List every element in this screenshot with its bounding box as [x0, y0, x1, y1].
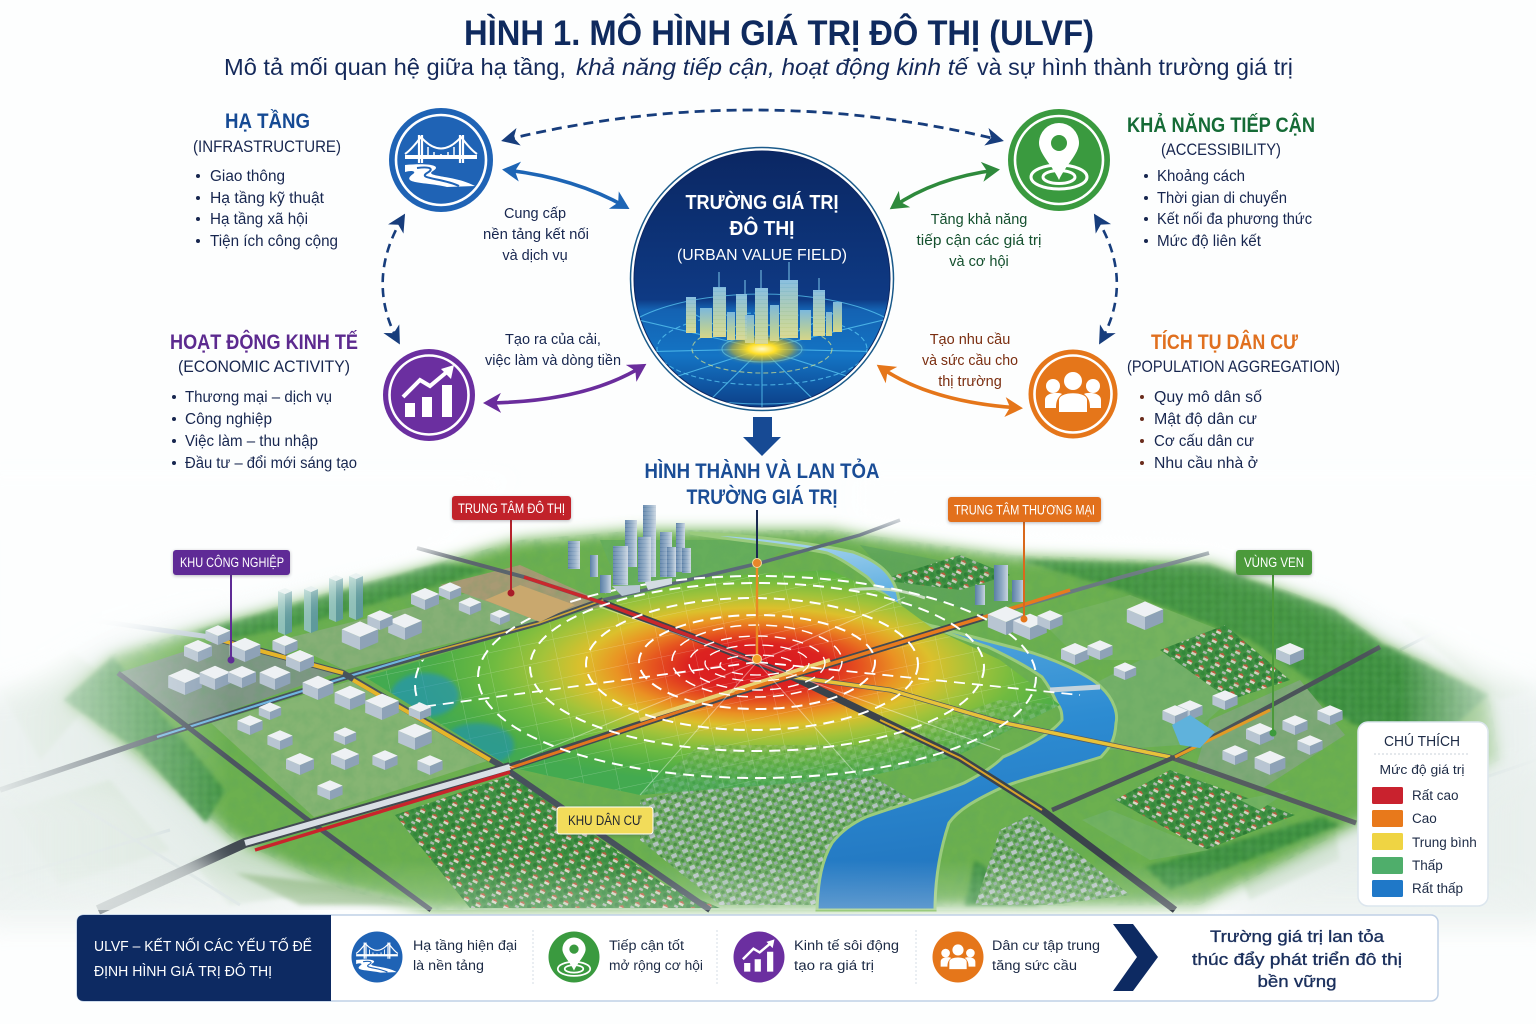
legend: Thấp — [1412, 858, 1443, 873]
callout: residential area — [557, 807, 653, 834]
heading inside circle: (URBAN VALUE FIELD) — [677, 247, 847, 264]
summary heading: ULVF – KẾT NỐI CÁC YẾU TỐ ĐỂ — [94, 937, 312, 955]
panel: infrastructure text: Hạ tầng xã hội — [210, 211, 308, 228]
panel: accessibility text: KHẢ NĂNG TIẾP CẬN — [1127, 113, 1315, 137]
arrow: dashed infrastructure to accessibility — [505, 110, 1000, 140]
text: infrastructure relation: Cung cấp — [504, 206, 566, 222]
residential areas — [395, 775, 720, 908]
item: modern infrastructure: Hạ tầng hiện đại — [413, 938, 517, 953]
panel: economic activity text: Công nghiệp — [185, 411, 272, 428]
arrow: dashed accessibility to population — [1096, 217, 1117, 341]
item: dynamic economy: Kinh tế sôi động — [794, 938, 899, 953]
panel: central urban value field — [630, 146, 894, 412]
icon: economic activity chart — [383, 349, 475, 441]
subtitle: Mô tả mối quan hệ giữa hạ tầng, — [224, 54, 566, 80]
arrow: accessibility to value field — [893, 170, 996, 207]
panel: economic activity text — [170, 330, 358, 472]
text: economic relation: Tạo ra của cải, — [505, 332, 601, 348]
item: concentrated population: tăng sức cầu — [992, 958, 1077, 973]
chart: urban value field map — [0, 470, 1536, 925]
text: accessibility relation: Tăng khả năng — [931, 212, 1027, 228]
forests — [64, 560, 1488, 905]
panel: population aggregation text: Quy mô dân số — [1154, 389, 1262, 406]
item: dynamic economy: tạo ra giá trị — [794, 958, 874, 973]
legend: Cao — [1412, 811, 1437, 826]
legend: Rất thấp — [1412, 881, 1463, 896]
subtitle — [224, 54, 1293, 80]
arrow: chevron — [1113, 924, 1158, 991]
heading inside circle: TRƯỜNG GIÁ TRỊ — [686, 190, 838, 214]
panel: infrastructure text: Hạ tầng kỹ thuật — [210, 190, 325, 207]
text: accessibility relation: tiếp cận các giá trị — [916, 233, 1042, 249]
icon: accessibility pin — [1008, 109, 1110, 211]
item: concentrated population: Dân cư tập trung — [992, 938, 1100, 953]
icon: population people — [1028, 350, 1118, 438]
panel: infrastructure text: (INFRASTRUCTURE) — [193, 138, 341, 156]
skyscrapers — [568, 505, 1024, 605]
text: economic relation: việc làm và dòng tiền — [485, 353, 621, 369]
panel: population aggregation text: Nhu cầu nhà ở — [1154, 455, 1258, 472]
text: infrastructure relation: và dịch vụ — [502, 248, 568, 264]
heading: value formation: HÌNH THÀNH VÀ LAN TỎA — [644, 459, 880, 483]
arrow: infrastructure to value field — [506, 170, 626, 207]
legend: CHÚ THÍCH — [1384, 733, 1460, 750]
panel: infrastructure text: Tiện ích công cộng — [210, 233, 338, 250]
subtitle: và sự hình thành trường giá trị — [977, 54, 1293, 80]
panel: economic activity text: Việc làm – thu nhập — [185, 433, 318, 450]
item: modern infrastructure — [352, 932, 517, 982]
callout: periphery: VÙNG VEN — [1244, 555, 1304, 570]
callout: value centre pin — [752, 510, 762, 664]
text: accessibility relation: và cơ hội — [949, 254, 1009, 270]
item: good access: Tiếp cận tốt — [609, 938, 684, 953]
item: concentrated population — [932, 932, 1100, 982]
panel: population aggregation text: Mật độ dân cư — [1154, 411, 1257, 428]
callout: urban centre — [452, 496, 571, 596]
panel: accessibility text: (ACCESSIBILITY) — [1161, 141, 1281, 159]
text: infrastructure relation: nền tảng kết nối — [483, 227, 589, 243]
item: dynamic economy — [734, 932, 899, 982]
ground blocks — [118, 640, 345, 725]
conclusion text: Trường giá trị lan tỏa — [1210, 927, 1385, 946]
summary heading: ĐỊNH HÌNH GIÁ TRỊ ĐÔ THỊ — [94, 963, 272, 980]
arrow: population to value field — [880, 367, 1019, 408]
buildings — [168, 582, 1343, 800]
panel: economic activity text: HOẠT ĐỘNG KINH TẾ — [170, 330, 358, 354]
arrow: economic activity to value field — [487, 366, 643, 403]
panel: economic activity text: Thương mại – dịch vụ — [185, 389, 332, 406]
glass towers — [278, 573, 363, 635]
heading: value formation — [644, 459, 880, 509]
text: population relation — [922, 332, 1018, 390]
heading: value formation: TRƯỜNG GIÁ TRỊ — [686, 485, 838, 509]
edge fades — [0, 540, 230, 910]
legend: Mức độ giá trị — [1380, 762, 1465, 777]
panel: economic activity text: Đầu tư – đổi mới sáng tạo — [185, 455, 357, 472]
callout: commercial centre: TRUNG TÂM THƯƠNG MẠI — [954, 502, 1095, 518]
callout: residential area: KHU DÂN CƯ — [568, 813, 642, 828]
panel: accessibility text: Thời gian di chuyển — [1157, 190, 1287, 207]
panel: infrastructure text: HẠ TẦNG — [225, 110, 310, 133]
subtitle: khả năng tiếp cận, hoạt động kinh tế — [576, 54, 970, 80]
panel: accessibility text: Khoảng cách — [1157, 168, 1245, 185]
legend: Rất cao — [1412, 788, 1459, 803]
callout: industrial zone — [173, 550, 290, 664]
callout: industrial zone: KHU CÔNG NGHIỆP — [180, 555, 284, 570]
conclusion text: thúc đẩy phát triển đô thị — [1192, 950, 1402, 969]
text: accessibility relation — [916, 212, 1042, 270]
river — [690, 533, 1117, 910]
item: modern infrastructure: là nền tảng — [413, 958, 484, 973]
item: good access — [548, 932, 703, 982]
heading inside circle — [677, 190, 847, 264]
legend — [1358, 722, 1488, 906]
panel: population aggregation text: (POPULATION AGGREGATION) — [1127, 358, 1340, 376]
text: population relation: Tạo nhu cầu — [930, 332, 1010, 348]
panel: population aggregation text: Cơ cấu dân cư — [1154, 433, 1254, 450]
panel: accessibility text: Kết nối đa phương thức — [1157, 211, 1312, 228]
item: good access: mở rộng cơ hội — [609, 958, 703, 973]
conclusion text: bền vững — [1258, 972, 1336, 991]
summary heading — [77, 915, 331, 1001]
panel: population aggregation text: TÍCH TỤ DÂN CƯ — [1151, 330, 1298, 354]
text: economic relation — [485, 332, 621, 369]
panel: infrastructure text — [193, 110, 341, 250]
panel: bottom summary bar — [77, 915, 1438, 1001]
title: HÌNH 1. MÔ HÌNH GIÁ TRỊ ĐÔ THỊ (ULVF) — [464, 13, 1094, 53]
roads — [0, 520, 1380, 910]
panel: population aggregation text — [1127, 330, 1340, 472]
text: population relation: thị trường — [938, 374, 1002, 390]
value rings — [414, 575, 1080, 779]
ground texture — [170, 530, 1426, 910]
arrow: down to value formation — [743, 417, 781, 456]
callout: periphery — [1236, 550, 1312, 736]
callout: commercial centre — [948, 497, 1101, 622]
panel: accessibility text: Mức độ liên kết — [1157, 233, 1262, 250]
panel: economic activity text: (ECONOMIC ACTIVITY) — [178, 358, 350, 376]
text: infrastructure relation — [483, 206, 589, 264]
conclusion text — [1192, 927, 1402, 991]
panel: accessibility text — [1127, 113, 1315, 250]
city skyline — [686, 280, 842, 344]
icon: infrastructure bridge — [389, 108, 493, 212]
text: population relation: và sức cầu cho — [922, 353, 1018, 369]
legend: Trung bình — [1412, 835, 1477, 850]
arrow: dashed infrastructure to economic activity — [383, 217, 403, 341]
heading inside circle: ĐÔ THỊ — [730, 216, 794, 240]
panel: infrastructure text: Giao thông — [210, 168, 285, 185]
callout: urban centre: TRUNG TÂM ĐÔ THỊ — [458, 501, 565, 516]
